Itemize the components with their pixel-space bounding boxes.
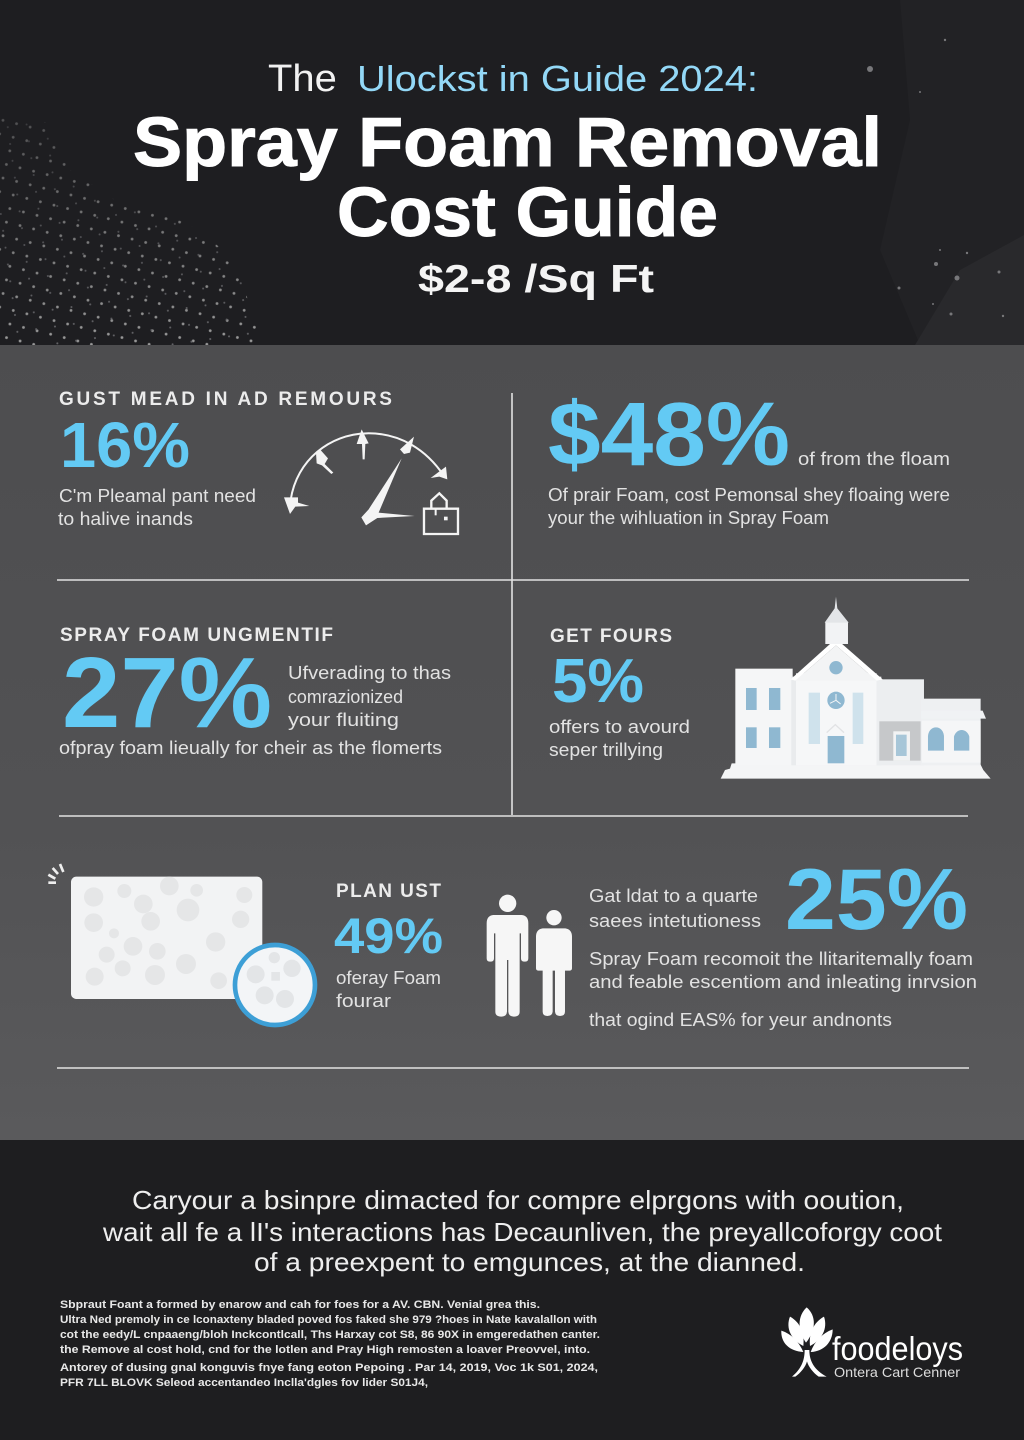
stat: 5%: seper trillying [549, 740, 663, 760]
stat: $48%: $48% [548, 385, 790, 485]
stat: 16%: 16% [60, 409, 190, 481]
stat: 49%: 49% [334, 908, 443, 964]
title line 2: Cost Guide [337, 173, 718, 251]
footnotes: the Remove al cost hold, cnd for the lotlen and Pray High remosten a loaver Preovvel, into. [60, 1344, 590, 1356]
footnotes: Antorey of dusing gnal konguvis fnye fang eoton Pepoing . Par 14, 2019, Voc 1k S01, 2024, [60, 1362, 598, 1374]
footnotes: cot the eedy/L cnpaaeng/bloh Inckcontlcall, Ths Harxay cot S8, 86 90X in emgeredathen canter. [60, 1329, 600, 1341]
kicker highlight: Ulockst in Guide 2024: [357, 58, 758, 99]
icon: two people [487, 895, 572, 1017]
decorative faint polygons and specks [867, 0, 1024, 345]
stat: 27%: ofpray foam lieually for cheir as the flomerts [59, 738, 442, 758]
stat: 49%: oferay Foam [336, 968, 441, 988]
stat: 5%: offers to avourd [549, 717, 690, 737]
stat: 16%: C'm Pleamal pant need [59, 486, 256, 506]
logo wordmark: foodeloys [832, 1330, 963, 1367]
stat: 25%: 25% [785, 852, 968, 948]
footnotes [60, 1299, 600, 1389]
stat: 25%: and feable escentiom and inleating inrvsion [589, 972, 977, 992]
main stats panel [0, 345, 1024, 1140]
header title block [133, 58, 882, 301]
stat: 27% [59, 625, 451, 758]
stat: 25%: saees intetutioness [589, 911, 761, 931]
stat: 49% [334, 881, 443, 1011]
stat: 5%: 5% [552, 647, 644, 716]
price subtitle: $2-8 /Sq Ft [418, 258, 654, 301]
logo tagline: Ontera Cart Cenner [834, 1364, 960, 1380]
logo [781, 1307, 963, 1380]
footnotes: PFR 7LL BLOVK Seleod accentandeo Inclla'dgles fov lider S01J4, [60, 1377, 428, 1389]
logo tree [781, 1307, 833, 1377]
title line 1: Spray Foam Removal [133, 103, 882, 181]
stat: 49%: PLAN UST [336, 881, 441, 902]
stat: 27%: comrazionized [288, 687, 403, 707]
footer summary: Caryour a bsinpre dimacted for compre elprgons with ooution, [132, 1185, 904, 1215]
stat: 5% [549, 626, 690, 760]
footer summary [102, 1185, 943, 1277]
stat: $48%: Of prair Foam, cost Pemonsal shey floaing were [548, 485, 950, 505]
footnotes: Ultra Ned premoly in ce lconaxteny bladed poved fos faked she 979 ?hoes in Nate kavalallon with [60, 1314, 597, 1326]
stat: 25%: that ogind EAS% for yeur andnonts [589, 1010, 892, 1030]
stat: 25%: Spray Foam recomoit the llitaritemally foam [589, 949, 973, 969]
stat: $48%: your the wihluation in Spray Foam [548, 508, 829, 528]
icon: foam panel with magnifier [48, 864, 315, 1025]
stat: 5%: GET FOURS [550, 626, 672, 647]
stat: 49%: fourar [336, 991, 391, 1011]
stat: 16%: GUST MEAD IN AD REMOURS [59, 389, 392, 410]
stat: 27%: SPRAY FOAM UNGMENTIF [60, 625, 333, 646]
stat: 25%: Gat ldat to a quarte [589, 886, 758, 906]
footer summary: wait all fe a lI's interactions has Decaunliven, the preyallcoforgy coot [102, 1217, 943, 1247]
kicker: The [268, 58, 348, 100]
stat: $48% [548, 385, 950, 528]
stat: 27%: 27% [62, 637, 272, 749]
stat: 25% [589, 852, 977, 1030]
stat: 16%: to halive inands [58, 509, 193, 529]
footer [0, 1140, 1024, 1440]
icon: white building [721, 597, 991, 779]
header background [0, 0, 1024, 345]
stat: 16% [58, 389, 392, 529]
footer summary: of a preexpent to emgunces, at the dianned. [254, 1247, 805, 1277]
stat: 27%: Ufverading to thas [288, 663, 451, 683]
icon: gauge with lock [284, 429, 458, 534]
stat: 27%: your fluiting [288, 710, 399, 730]
stat: $48%: of from the floam [798, 449, 950, 469]
footnotes: Sbpraut Foant a formed by enarow and cah for foes for a AV. CBN. Venial grea this. [60, 1299, 540, 1311]
decorative dot wave [0, 100, 260, 345]
